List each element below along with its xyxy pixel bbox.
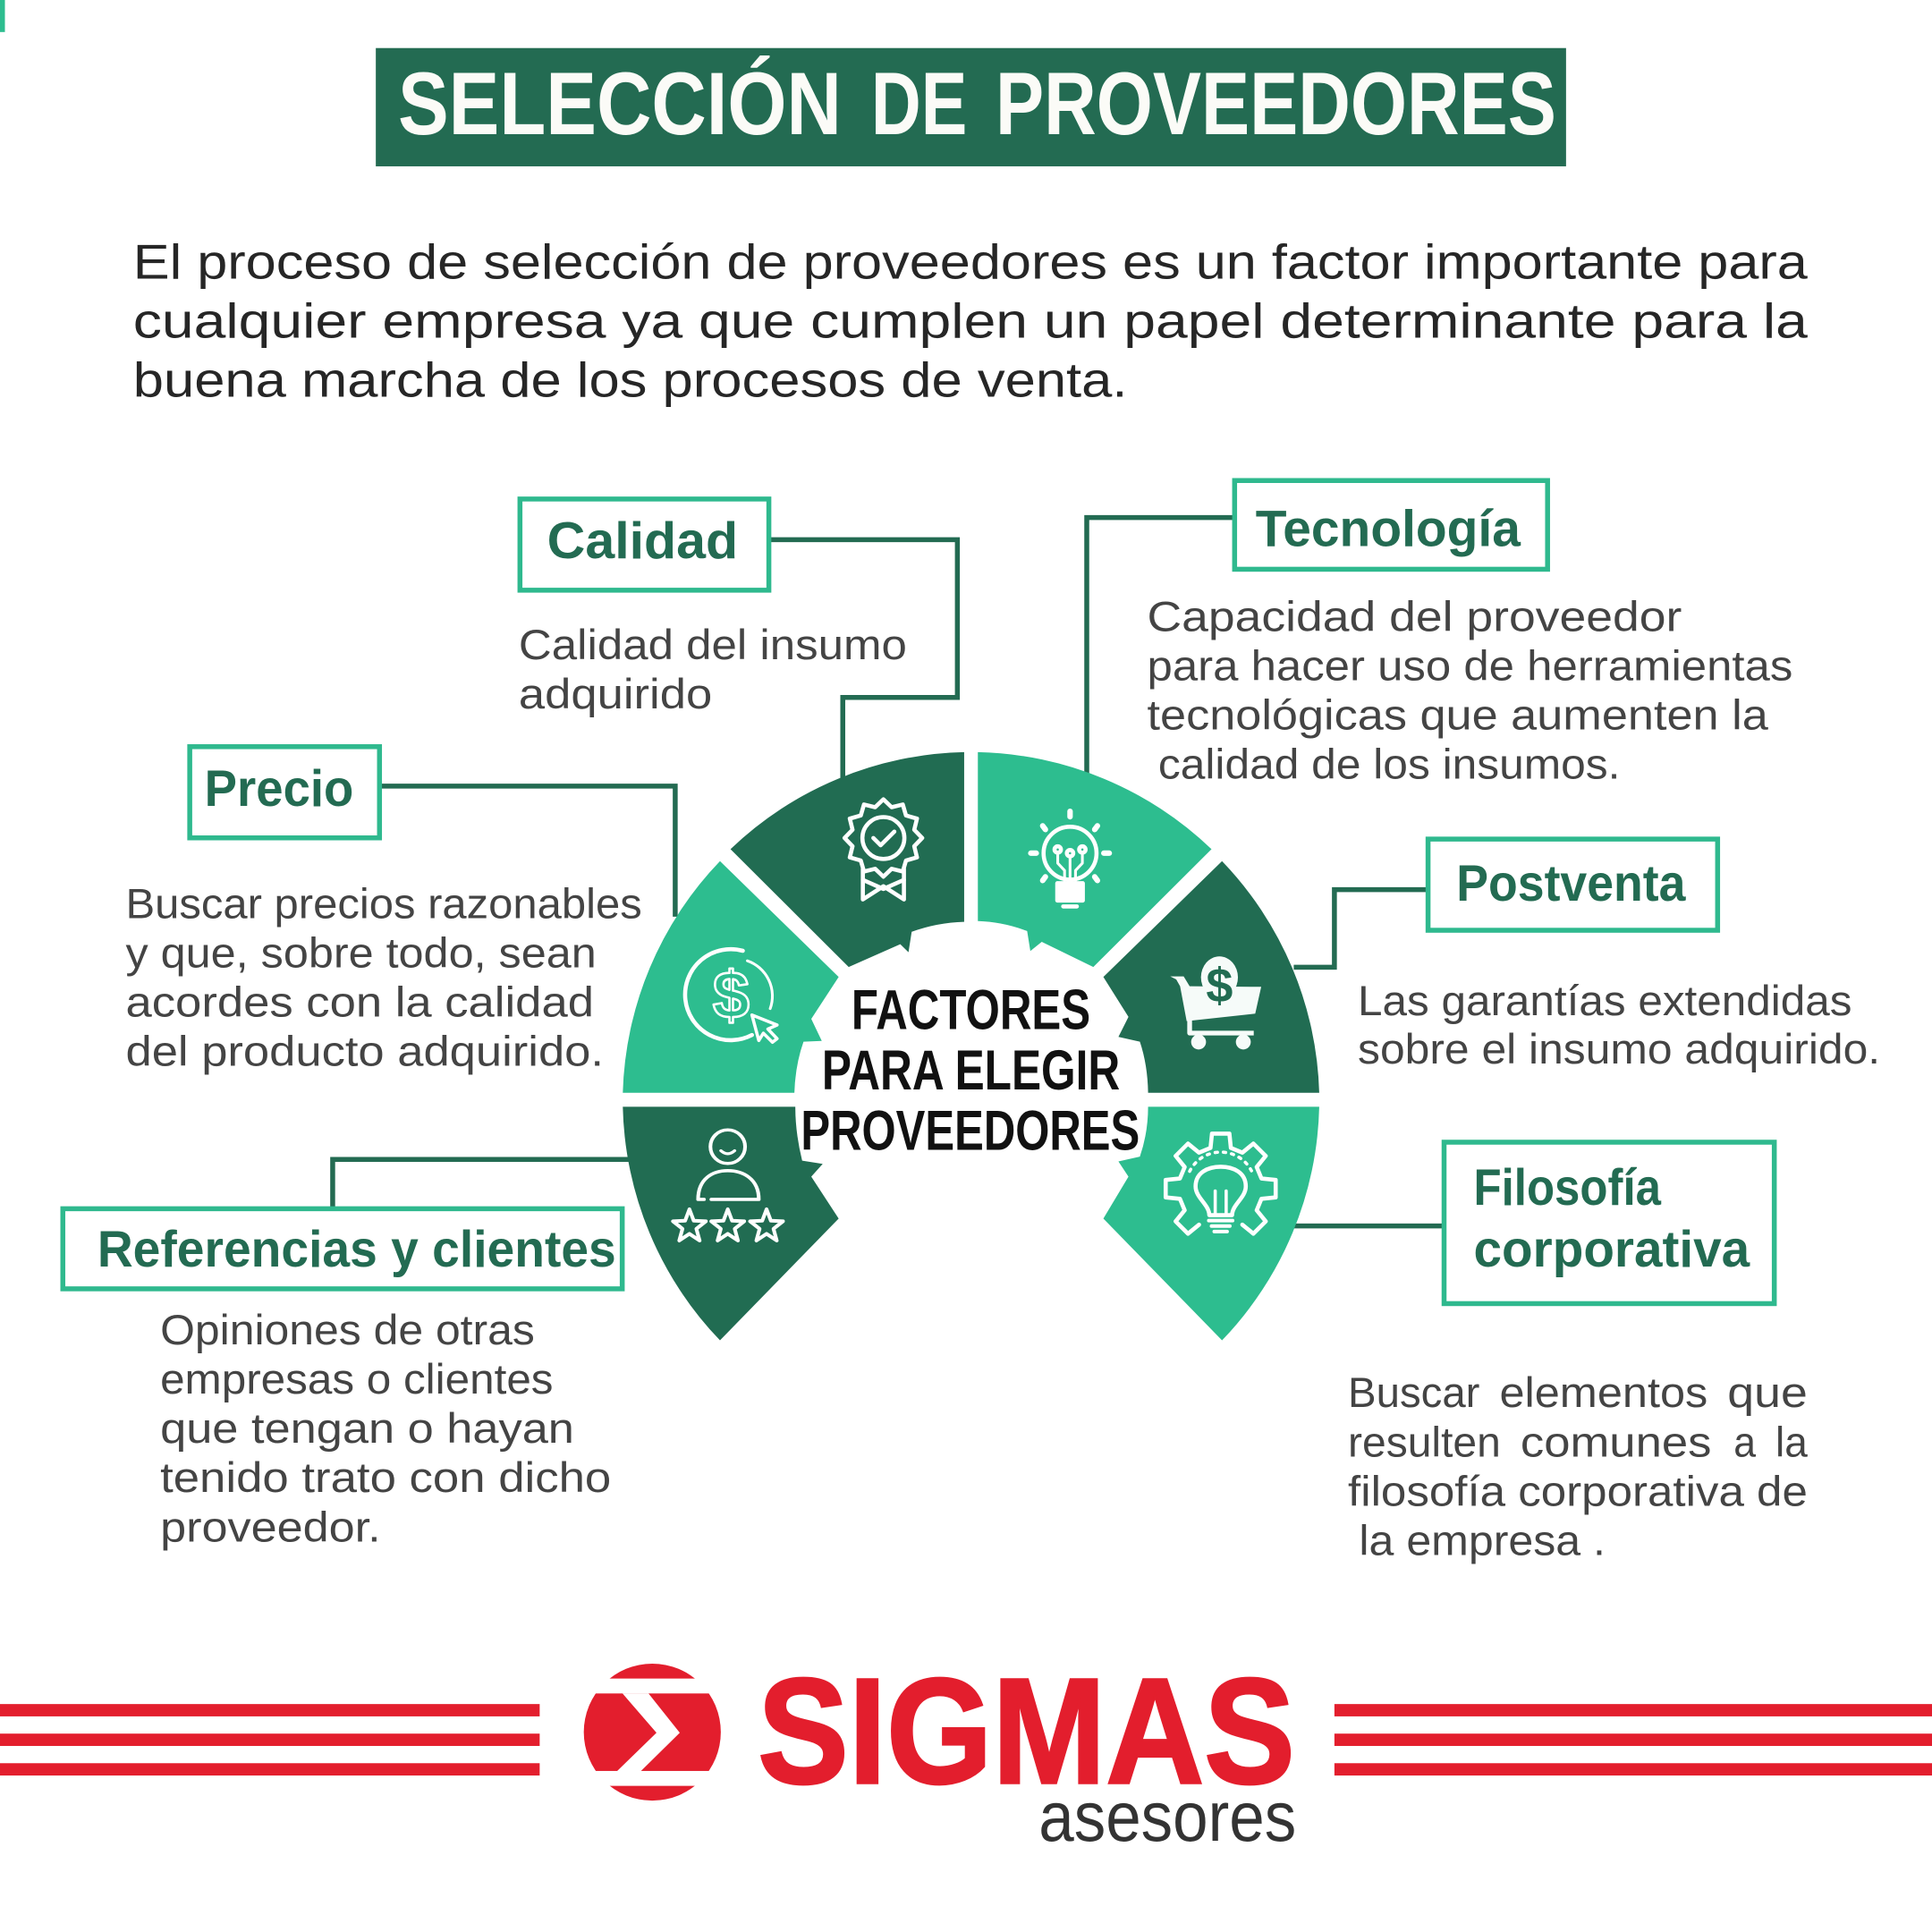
- text: tecnologia: tecnológicas que aumenten la: [1147, 692, 1769, 739]
- text: precio: acordes con la calidad: [126, 979, 594, 1025]
- logo wordmark: asesores: [1038, 1777, 1296, 1856]
- text: filosofia corporativa: a: [1733, 1419, 1757, 1465]
- sector: postventa: [1104, 861, 1319, 1093]
- text: tecnologia: calidad de los insumos.: [1158, 741, 1620, 788]
- text: tecnologia: Capacidad del proveedor: [1147, 593, 1682, 640]
- label: referencias y clientes: Referencias y clientes: [97, 1221, 616, 1278]
- label: filosofia corporativa: Filosofía: [1474, 1159, 1662, 1216]
- text: referencias y clientes: [160, 1307, 611, 1550]
- intro paragraph: El proceso de selección de proveedores es un factor importante para: [133, 233, 1808, 289]
- label: filosofia corporativa: [1444, 1142, 1775, 1303]
- center heading: [801, 979, 1140, 1162]
- logo wordmark: SIGMAS: [758, 1647, 1295, 1815]
- text: referencias y clientes: que tengan o hayan: [160, 1405, 574, 1452]
- icon: price coin with cursor: [685, 949, 777, 1042]
- intro paragraph: cualquier empresa ya que cumplen un papel determinante para la: [133, 292, 1808, 348]
- text: postventa: [1358, 978, 1880, 1072]
- text: filosofia corporativa: comunes: [1521, 1419, 1711, 1465]
- label: precio: Precio: [205, 760, 353, 818]
- label: tecnologia: [1234, 480, 1547, 569]
- label: calidad: Calidad: [547, 513, 738, 570]
- center heading: FACTORES: [852, 979, 1090, 1041]
- text: calidad: [519, 622, 907, 717]
- sector: calidad: [731, 752, 964, 967]
- sector: tecnologia: [978, 752, 1212, 967]
- text: filosofia corporativa: filosofía corporativa de: [1348, 1468, 1808, 1514]
- text: referencias y clientes: tenido trato con dicho: [160, 1454, 611, 1501]
- label: calidad: [520, 499, 769, 590]
- semicircle diagram of six factors: [623, 752, 1319, 1341]
- text: precio: [126, 880, 642, 1075]
- text: calidad: Calidad del insumo: [519, 622, 907, 668]
- label: precio: [190, 747, 379, 838]
- text: referencias y clientes: proveedor.: [160, 1504, 381, 1550]
- label: filosofia corporativa: corporativa: [1474, 1221, 1750, 1278]
- label: tecnologia: Tecnología: [1256, 500, 1521, 557]
- icon: shopping cart with dollar: $: [1206, 959, 1233, 1013]
- text: precio: Buscar precios razonables: [126, 880, 642, 927]
- text: tecnologia: [1147, 593, 1792, 788]
- text: referencias y clientes: empresas o clientes: [160, 1356, 554, 1402]
- title banner: PROVEEDORES: [996, 55, 1556, 154]
- icon: quality badge: [844, 800, 922, 900]
- text: filosofia corporativa: la: [1775, 1419, 1809, 1465]
- text: precio: y que, sobre todo, sean: [126, 929, 597, 976]
- title banner: DE: [871, 55, 967, 154]
- sector: referencias: [623, 1106, 839, 1341]
- text: filosofia corporativa: elementos: [1499, 1369, 1707, 1416]
- center heading: PARA ELEGIR: [822, 1039, 1120, 1102]
- sector: filosofia: [1104, 1106, 1319, 1341]
- icon: price coin with cursor: $: [713, 958, 750, 1032]
- center heading: PROVEEDORES: [801, 1099, 1140, 1162]
- text: precio: del producto adquirido.: [126, 1029, 604, 1075]
- label: referencias y clientes: [63, 1208, 623, 1289]
- text: tecnologia: para hacer uso de herramientas: [1147, 642, 1792, 689]
- icon: gear with light bulb: [1165, 1133, 1275, 1233]
- sector: precio: [623, 861, 839, 1093]
- intro paragraph: [133, 233, 1808, 408]
- connector lines: [333, 518, 1444, 1226]
- text: filosofia corporativa: Buscar: [1348, 1369, 1479, 1416]
- intro paragraph: buena marcha de los procesos de venta.: [133, 352, 1127, 408]
- icon: person with three stars: [673, 1130, 783, 1241]
- title banner: [376, 48, 1566, 166]
- text: postventa: Las garantías extendidas: [1358, 978, 1852, 1024]
- icon: shopping cart with dollar: [1170, 956, 1261, 1049]
- text: postventa: sobre el insumo adquirido.: [1358, 1026, 1880, 1072]
- text: filosofia corporativa: la empresa .: [1359, 1517, 1606, 1563]
- text: referencias y clientes: Opiniones de otras: [160, 1307, 535, 1353]
- text: filosofia corporativa: resulten: [1348, 1419, 1501, 1465]
- text: filosofia corporativa: que: [1727, 1369, 1808, 1416]
- label: postventa: Postventa: [1456, 855, 1686, 912]
- stripes right: [1335, 1704, 1932, 1775]
- icon: circuit light bulb: [1030, 811, 1109, 906]
- label: postventa: [1428, 839, 1717, 930]
- text: calidad: adquirido: [519, 671, 712, 717]
- title banner: SELECCIÓN: [398, 55, 842, 154]
- text: filosofia corporativa: [1348, 1369, 1809, 1563]
- logo mark: [579, 1664, 727, 1801]
- stripes left: [0, 1704, 539, 1775]
